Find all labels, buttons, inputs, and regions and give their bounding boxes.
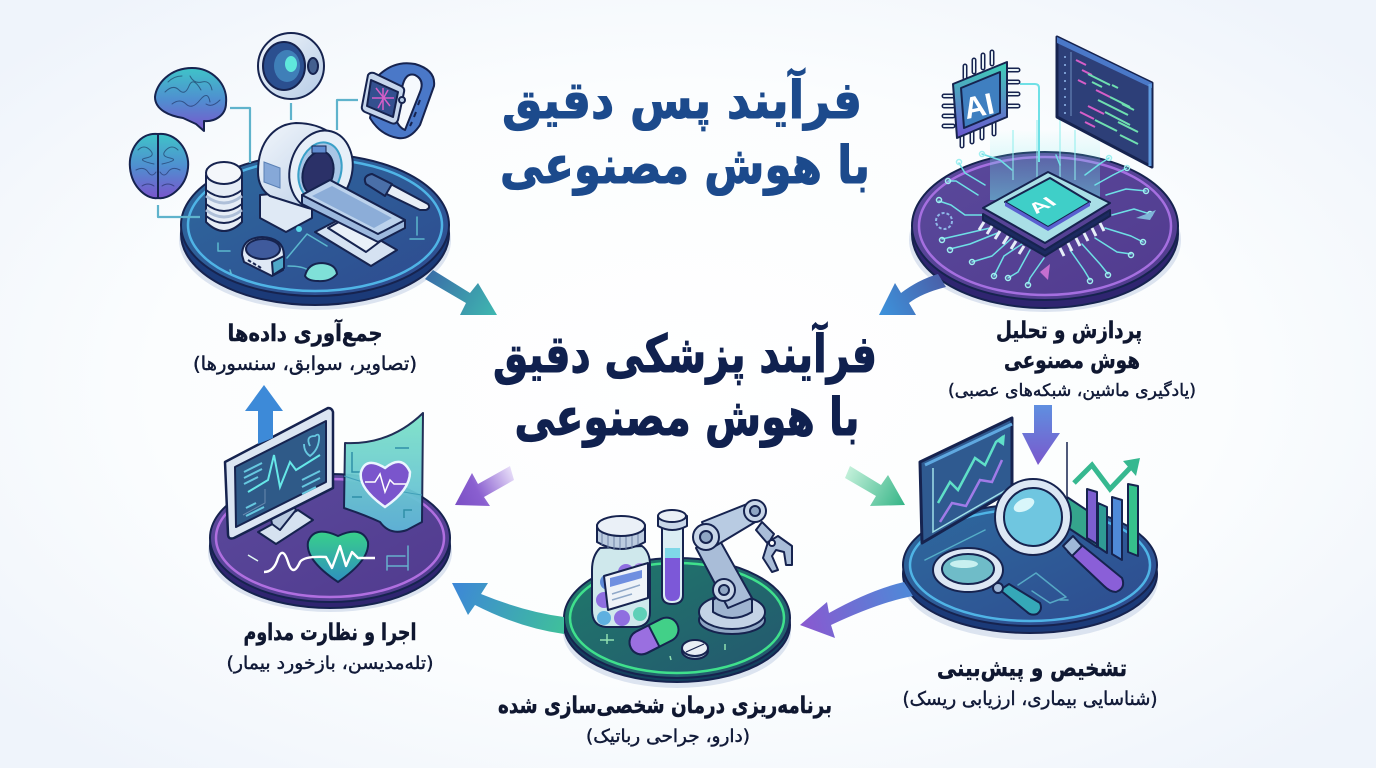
arrow: AI analysis to center	[879, 274, 946, 315]
connector line	[1020, 84, 1039, 162]
arrow: AI analysis to diagnosis	[1022, 405, 1060, 465]
icon: brain side view	[155, 68, 226, 131]
icon: brain top view	[130, 134, 188, 198]
title: top heading	[500, 68, 870, 196]
label: diagnosis and prediction: (شناسایی بیماری، ارزیابی ریسک)	[902, 688, 1158, 710]
icon: smart ring	[242, 237, 284, 276]
panel: AI analysis	[909, 37, 1181, 312]
arrow: treatment to monitoring	[452, 583, 564, 634]
icon: tablet	[682, 640, 708, 659]
icon: endoscope camera	[258, 33, 324, 99]
icon: central AI chip	[979, 172, 1110, 256]
circuit traces	[936, 152, 1156, 288]
label: personalized treatment: (دارو، جراحی رباتیک)	[586, 726, 750, 747]
label: personalized treatment: برنامه‌ریزی درمان شخصی‌سازی شده	[498, 693, 832, 719]
label: implementation and monitoring: (تله‌مدیسن، بازخورد بیمار)	[226, 653, 434, 674]
icon: capsule	[625, 614, 683, 658]
title: central heading	[493, 322, 877, 448]
label: data collection	[193, 318, 417, 375]
label: data collection: جمع‌آوری داده‌ها	[228, 318, 382, 347]
title: central heading: فرآیند پزشکی دقیق	[493, 322, 877, 385]
label: diagnosis and prediction	[902, 656, 1158, 710]
panel: implementation and monitoring	[208, 408, 452, 612]
icon: sensor pen	[365, 174, 429, 210]
icon: small magnifier	[933, 548, 1041, 615]
panel: diagnosis and prediction	[902, 418, 1158, 640]
icon: wearable patch	[287, 226, 337, 281]
label: AI analysis: هوش مصنوعی	[1004, 348, 1140, 374]
icon: holographic heart display	[344, 413, 423, 532]
icon: MRI scanner	[258, 123, 405, 266]
panel: data collection	[130, 33, 451, 310]
arrow: diagnosis to treatment	[800, 582, 913, 638]
icon: patient monitor	[225, 408, 333, 544]
arrow: data collection to center	[425, 270, 497, 315]
label: implementation and monitoring	[226, 620, 434, 674]
bar chart with trend arrow	[1067, 442, 1140, 560]
label: AI analysis	[948, 318, 1196, 401]
icon: trend chart screen	[920, 418, 1012, 543]
arrow: center to monitoring	[455, 466, 514, 506]
arrow: center to diagnosis	[845, 466, 905, 506]
label: data collection: (تصاویر، سوابق، سنسورها)	[193, 353, 417, 375]
panel: personalized treatment	[563, 500, 792, 688]
icon: central AI chip: AI	[1022, 194, 1061, 217]
icon: test tube	[658, 510, 687, 604]
icon: code panel	[1057, 37, 1152, 167]
platform: blue disc	[902, 504, 1158, 640]
icon: floating AI chip	[944, 52, 1018, 146]
connector lines	[158, 100, 358, 217]
label: implementation and monitoring: اجرا و نظارت مداوم	[244, 620, 416, 646]
icon: robotic arm	[693, 500, 792, 634]
glow beams	[990, 120, 1100, 200]
arrow: monitoring to data collection	[245, 385, 283, 444]
platform: purple disc	[909, 152, 1181, 312]
label: personalized treatment	[498, 693, 832, 747]
icon: floating AI chip: AI	[961, 87, 997, 126]
label: diagnosis and prediction: تشخیص و پیش‌بینی	[937, 656, 1127, 682]
platform: blue disc	[179, 154, 451, 310]
platform: purple disc	[208, 474, 452, 612]
icon: large magnifier	[995, 479, 1123, 592]
title: top heading: با هوش مصنوعی	[500, 136, 870, 196]
icon: medicine jar	[592, 516, 650, 627]
label: AI analysis: (یادگیری ماشین، شبکه‌های عصبی)	[948, 380, 1196, 401]
icon: heart with pulse	[248, 532, 408, 582]
label: AI analysis: پردازش و تحلیل	[996, 318, 1142, 344]
title: top heading: فرآیند پس دقیق	[502, 68, 862, 131]
icon: data storage cylinder	[206, 162, 242, 231]
title: central heading: با هوش مصنوعی	[514, 388, 860, 448]
icon: smartwatch	[362, 63, 434, 138]
platform: green disc	[563, 558, 791, 688]
